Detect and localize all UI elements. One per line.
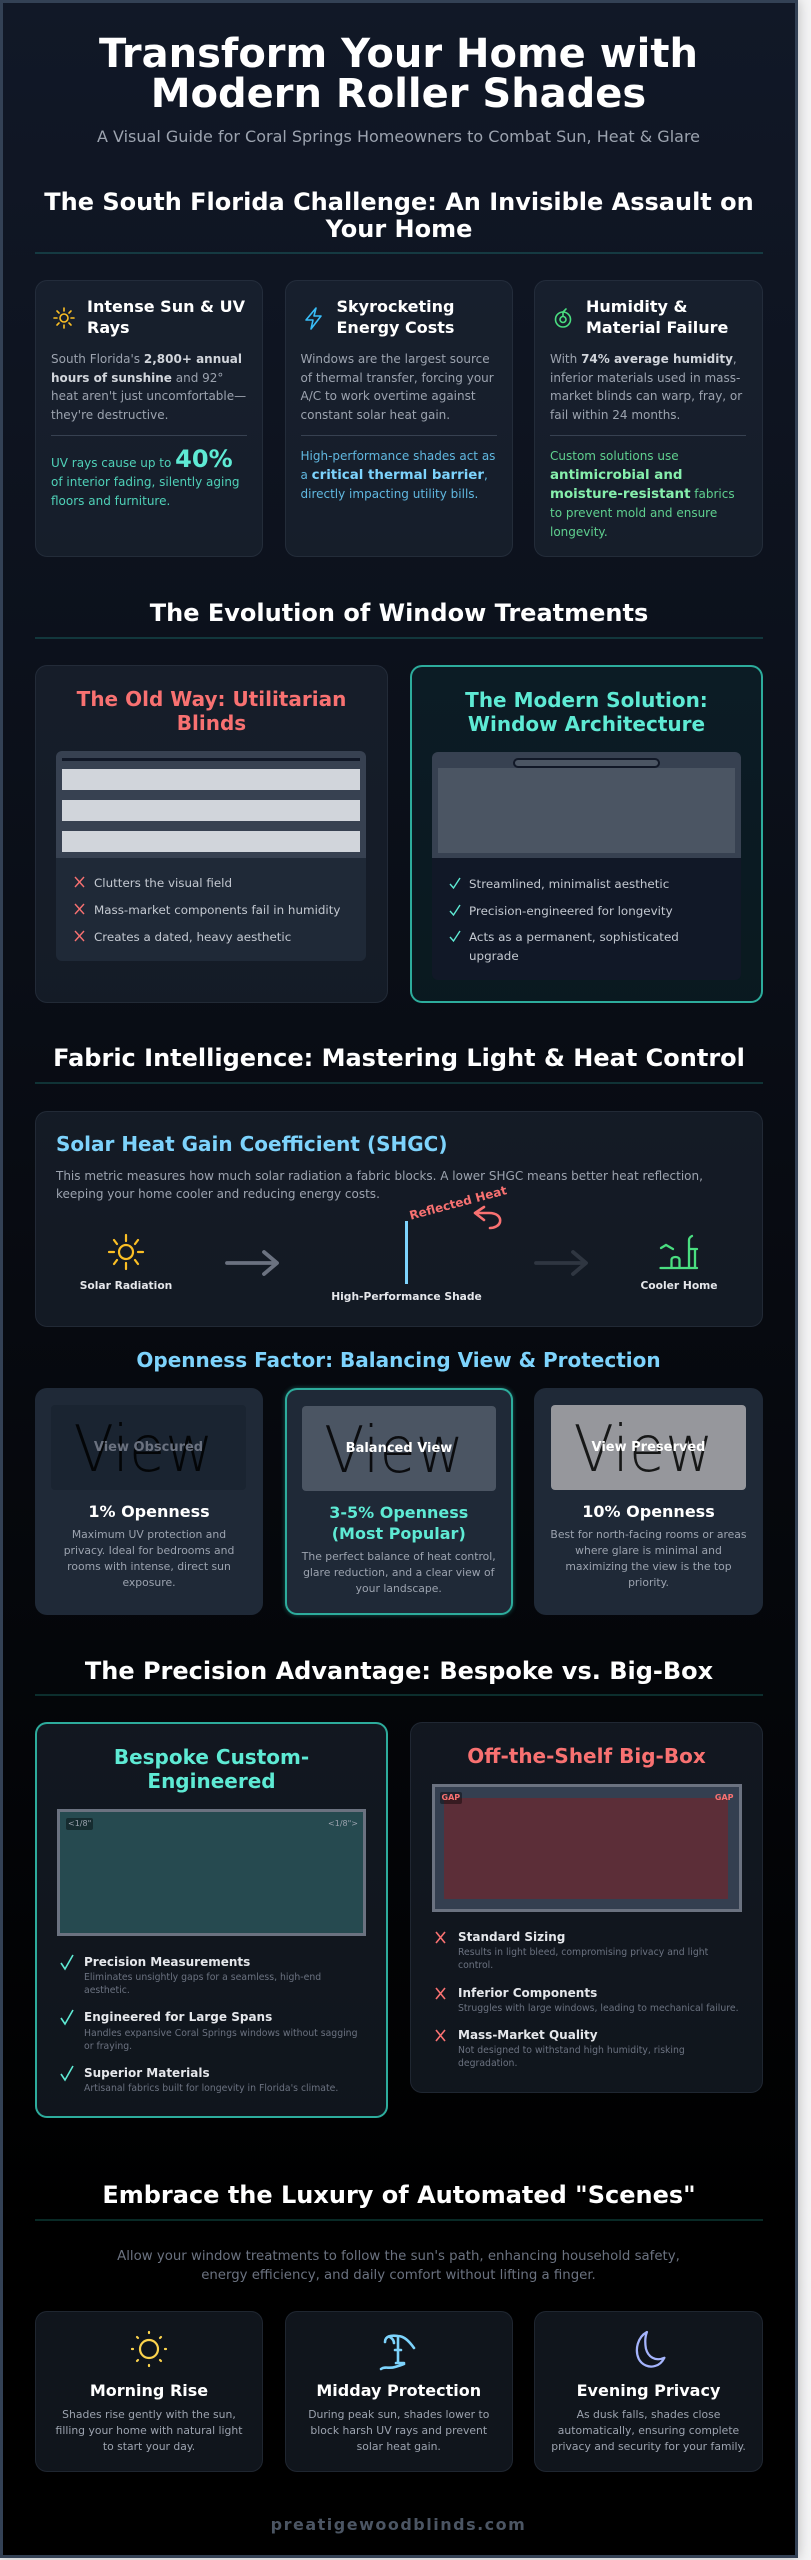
callout: thermal barrier: a critical thermal barrier, xyxy=(300,468,488,482)
feature description: degradation. xyxy=(458,2058,517,2069)
description: automatically, ensuring complete xyxy=(558,2424,739,2437)
heading: automated scenes: Embrace the Luxury of Automated "Scenes" xyxy=(102,2181,696,2209)
title: Evening Privacy xyxy=(577,2381,720,2400)
title: Midday Protection xyxy=(316,2381,481,2400)
shade line xyxy=(405,1221,408,1284)
heading: modern solution: Window Architecture xyxy=(468,712,705,736)
feature description xyxy=(458,1947,708,1971)
callout: antimicrobial: antimicrobial and xyxy=(550,468,682,482)
feature title: Mass-Market Quality xyxy=(458,2028,598,2042)
arrow: to home xyxy=(534,1250,588,1276)
body text: hours of sunshine and 92° xyxy=(51,371,223,385)
visual: view preserved: View Preserved xyxy=(592,1440,705,1455)
list: benefits: Streamlined, minimalist aesthetic xyxy=(469,877,669,891)
icon: cross xyxy=(436,1988,446,2000)
title: 3-5% Openness xyxy=(329,1503,468,1522)
description: priority. xyxy=(628,1576,669,1589)
list: benefits: upgrade xyxy=(469,949,519,963)
visual: custom fit: <1/8"> xyxy=(328,1819,358,1828)
visual: poor fit xyxy=(432,1784,742,1912)
panel: 10 percent xyxy=(534,1388,763,1615)
heading: modern solution: The Modern Solution: xyxy=(465,688,708,712)
heading: evolution: The Evolution of Window Treatments xyxy=(150,599,648,627)
label: reflected heat: Reflected Heat xyxy=(408,1183,508,1223)
heading: modern solution xyxy=(465,688,708,736)
feature description: Eliminates unsightly gaps for a seamless, high-end xyxy=(84,1972,321,1983)
heading: challenge xyxy=(44,188,754,243)
body text: they're destructive. xyxy=(51,408,168,422)
callout: antimicrobial: to prevent mold and ensure xyxy=(550,506,717,520)
body text: fail within 24 months. xyxy=(550,408,680,422)
subtitle: A Visual Guide for Coral Springs Homeowners to Combat Sun, Heat & Glare xyxy=(97,127,700,146)
feature description: Not designed to withstand high humidity, risking xyxy=(458,2045,685,2056)
description xyxy=(56,2408,242,2453)
icon: palm shade xyxy=(370,2325,430,2375)
card title: Rays xyxy=(87,318,130,337)
panel: humidity xyxy=(534,280,763,557)
intro paragraph xyxy=(117,2249,680,2283)
feature description: Struggles with large windows, leading to mechanical failure. xyxy=(458,2003,739,2014)
heading: challenge: Your Home xyxy=(326,215,472,243)
visual: balanced view: View xyxy=(324,1414,464,1488)
card title: Energy Costs xyxy=(336,318,454,337)
description: The perfect balance of heat control, xyxy=(302,1550,496,1563)
description: where glare is minimal and xyxy=(575,1544,722,1557)
panel: morning rise xyxy=(35,2311,263,2472)
panel: bespoke xyxy=(35,1722,388,2118)
panel: 3-5 percent xyxy=(284,1388,513,1615)
callout: 40 percent: UV rays cause up to 40% xyxy=(51,445,233,473)
description: Maximum UV protection and xyxy=(72,1528,226,1541)
callout: antimicrobial: Custom solutions use xyxy=(550,448,679,462)
card title: Intense Sun & UV xyxy=(87,297,245,316)
panel: modern solution xyxy=(410,665,763,1003)
description xyxy=(550,1528,747,1589)
title xyxy=(99,31,698,117)
description: solar heat gain. xyxy=(357,2440,441,2453)
body text xyxy=(300,352,494,422)
list: drawbacks: Clutters the visual field xyxy=(94,876,232,890)
heading: old way: Blinds xyxy=(177,711,246,735)
feature description xyxy=(84,2028,357,2052)
description: block harsh UV rays and prevent xyxy=(310,2424,487,2437)
visual: balanced view xyxy=(302,1406,496,1491)
feature title: Inferior Components xyxy=(458,1986,597,2000)
description: rooms with intense, direct sun xyxy=(67,1560,231,1573)
body text: With 74% average humidity, xyxy=(550,352,737,366)
title: 1% Openness xyxy=(88,1502,210,1521)
list: drawbacks: Mass-market components fail in humidity xyxy=(94,903,340,917)
heading: challenge: The South Florida Challenge: An Invisible Assault on xyxy=(44,188,754,216)
body text: A/C to work overtime against xyxy=(300,389,476,403)
visual: view obscured: View Obscured xyxy=(94,1440,203,1455)
description: Shades rise gently with the sun, xyxy=(62,2408,236,2421)
panel: big-box xyxy=(410,1722,763,2093)
description: maximizing the view is the top xyxy=(565,1560,732,1573)
body text xyxy=(51,352,246,422)
description: glare reduction, and a clear view of xyxy=(303,1566,494,1579)
panel: SHGC xyxy=(35,1111,763,1327)
heading: old way xyxy=(76,687,346,735)
feature description: control. xyxy=(458,1960,493,1971)
visual: custom fit: <1/8" xyxy=(68,1819,91,1828)
heading: bespoke: Bespoke Custom- xyxy=(114,1745,309,1769)
icon: humidity xyxy=(554,308,572,328)
description: to start your day. xyxy=(103,2440,195,2453)
label: cooler home: Cooler Home xyxy=(640,1279,718,1292)
card title: Material Failure xyxy=(586,318,728,337)
callout: antimicrobial xyxy=(550,448,735,538)
paragraph: SHGC xyxy=(56,1168,703,1201)
description: exposure. xyxy=(122,1576,176,1589)
visual: balanced view: Balanced View xyxy=(346,1441,452,1456)
title: 10% Openness xyxy=(582,1502,715,1521)
icon: reflected arrow xyxy=(474,1206,502,1230)
description xyxy=(534,2407,763,2455)
card title xyxy=(336,297,454,337)
icon: check xyxy=(60,2010,74,2026)
feature title: Engineered for Large Spans xyxy=(84,2010,272,2024)
panel: midday protection xyxy=(284,2311,513,2472)
callout: 40 percent xyxy=(51,445,240,508)
description xyxy=(284,2407,513,2455)
description: As dusk falls, shades close xyxy=(577,2408,720,2421)
feature description: Results in light bleed, compromising privacy and light xyxy=(458,1947,708,1958)
heading: openness factor: Openness Factor: Balancing View & Protection xyxy=(136,1348,661,1372)
intro paragraph: Allow your window treatments to follow the sun's path, enhancing household safety, xyxy=(117,2249,680,2264)
card title xyxy=(586,297,728,337)
icon: moon xyxy=(632,2331,668,2368)
list: benefits: Precision-engineered for longevity xyxy=(469,904,673,918)
heading: fabric intelligence: Fabric Intelligence: Mastering Light & Heat Control xyxy=(53,1044,745,1072)
body text: heat aren't just uncomfortable— xyxy=(51,389,246,403)
panel: evening privacy xyxy=(534,2311,763,2472)
panel: old way xyxy=(35,665,388,1003)
icon: sun xyxy=(53,307,75,329)
visual: blinds xyxy=(56,751,366,858)
label: solar radiation: Solar Radiation xyxy=(80,1279,172,1292)
heading: precision advantage: The Precision Advantage: Bespoke vs. Big-Box xyxy=(85,1657,713,1685)
paragraph: SHGC: keeping your home cooler and reducing energy costs. xyxy=(56,1187,380,1201)
description xyxy=(302,1550,496,1595)
body text: constant solar heat gain. xyxy=(300,408,450,422)
body text: South Florida's 2,800+ annual xyxy=(51,352,242,366)
panel: energy costs xyxy=(284,280,513,557)
icon: check xyxy=(60,2066,74,2082)
feature description: Handles expansive Coral Springs windows without sagging xyxy=(84,2028,357,2039)
callout: 40 percent: of interior fading, silently aging xyxy=(51,475,240,489)
title xyxy=(329,1503,468,1543)
feature title: Superior Materials xyxy=(84,2066,210,2080)
icon: cooler home xyxy=(659,1234,698,1270)
heading: bespoke: Engineered xyxy=(147,1769,276,1793)
icon: morning sun xyxy=(130,2330,168,2368)
heading: old way: The Old Way: Utilitarian xyxy=(77,687,346,711)
callout: antimicrobial: moisture-resistant fabrics xyxy=(550,486,735,502)
feature title: Precision Measurements xyxy=(84,1955,250,1969)
visual: custom fit xyxy=(57,1809,366,1936)
callout: thermal barrier xyxy=(300,448,495,500)
description: privacy and security for your family. xyxy=(551,2440,746,2453)
list: benefits: Acts as a permanent, sophisticated xyxy=(469,930,679,944)
list: drawbacks xyxy=(56,858,366,961)
visual: view obscured: View xyxy=(74,1413,213,1487)
heading: SHGC: Solar Heat Gain Coefficient (SHGC) xyxy=(56,1132,447,1156)
icon: cross xyxy=(436,1932,446,1944)
title: Modern Roller Shades xyxy=(151,71,646,117)
intro paragraph: energy efficiency, and daily comfort without lifting a finger. xyxy=(201,2268,596,2283)
list: benefits xyxy=(432,858,741,980)
heading: bespoke xyxy=(114,1745,309,1793)
feature description: Artisanal fabrics built for longevity in Florida's climate. xyxy=(84,2083,338,2094)
body text: market blinds can warp, fray, or xyxy=(550,389,742,403)
visual: view obscured xyxy=(51,1405,246,1490)
title: Transform Your Home with xyxy=(99,31,698,77)
body text: of thermal transfer, forcing your xyxy=(300,371,494,385)
feature description: aesthetic. xyxy=(84,1985,130,1996)
visual: view preserved xyxy=(551,1405,746,1490)
callout: thermal barrier: directly impacting utility bills. xyxy=(300,486,478,500)
feature title: Standard Sizing xyxy=(458,1930,565,1944)
label: shade: High-Performance Shade xyxy=(331,1290,482,1303)
feature description xyxy=(84,1972,321,1996)
list: drawbacks: Creates a dated, heavy aesthetic xyxy=(94,930,291,944)
callout: thermal barrier: High-performance shades act as xyxy=(300,448,495,462)
description: privacy. Ideal for bedrooms and xyxy=(64,1544,234,1557)
feature description: or fraying. xyxy=(84,2041,132,2052)
card title xyxy=(87,297,245,337)
paragraph: SHGC: This metric measures how much solar radiation a fabric blocks. A lower SHGC means better heat reflection, xyxy=(56,1168,703,1182)
callout: 40 percent: floors and furniture. xyxy=(51,494,170,508)
body text xyxy=(550,352,742,422)
body text: Windows are the largest source xyxy=(300,352,490,366)
footer domain: preatigewoodblinds.com xyxy=(271,2515,526,2534)
arrow: to shade xyxy=(225,1250,279,1276)
icon: bolt xyxy=(305,307,322,330)
description: filling your home with natural light xyxy=(56,2424,242,2437)
description: During peak sun, shades lower to xyxy=(308,2408,489,2421)
visual: roller shade xyxy=(432,752,741,858)
icon: check xyxy=(60,1954,74,1970)
feature description xyxy=(458,2045,685,2069)
visual: view preserved: View xyxy=(574,1413,713,1487)
card title: Skyrocketing xyxy=(336,297,454,316)
card title: Humidity & xyxy=(586,297,687,316)
visual: poor fit: GAP xyxy=(715,1793,734,1802)
icon: solar radiation xyxy=(108,1234,144,1270)
callout: antimicrobial: longevity. xyxy=(550,524,608,538)
panel: intense sun xyxy=(35,280,263,557)
heading: big-box: Off-the-Shelf Big-Box xyxy=(467,1744,706,1768)
panel: 1 percent xyxy=(35,1388,263,1615)
title: (Most Popular) xyxy=(332,1524,466,1543)
body text: inferior materials used in mass- xyxy=(550,371,740,385)
title: Morning Rise xyxy=(90,2381,208,2400)
description: your landscape. xyxy=(356,1582,442,1595)
visual: poor fit: GAP xyxy=(442,1793,460,1802)
description xyxy=(64,1528,234,1589)
description: Best for north-facing rooms or areas xyxy=(550,1528,747,1541)
icon: cross xyxy=(436,2030,446,2042)
